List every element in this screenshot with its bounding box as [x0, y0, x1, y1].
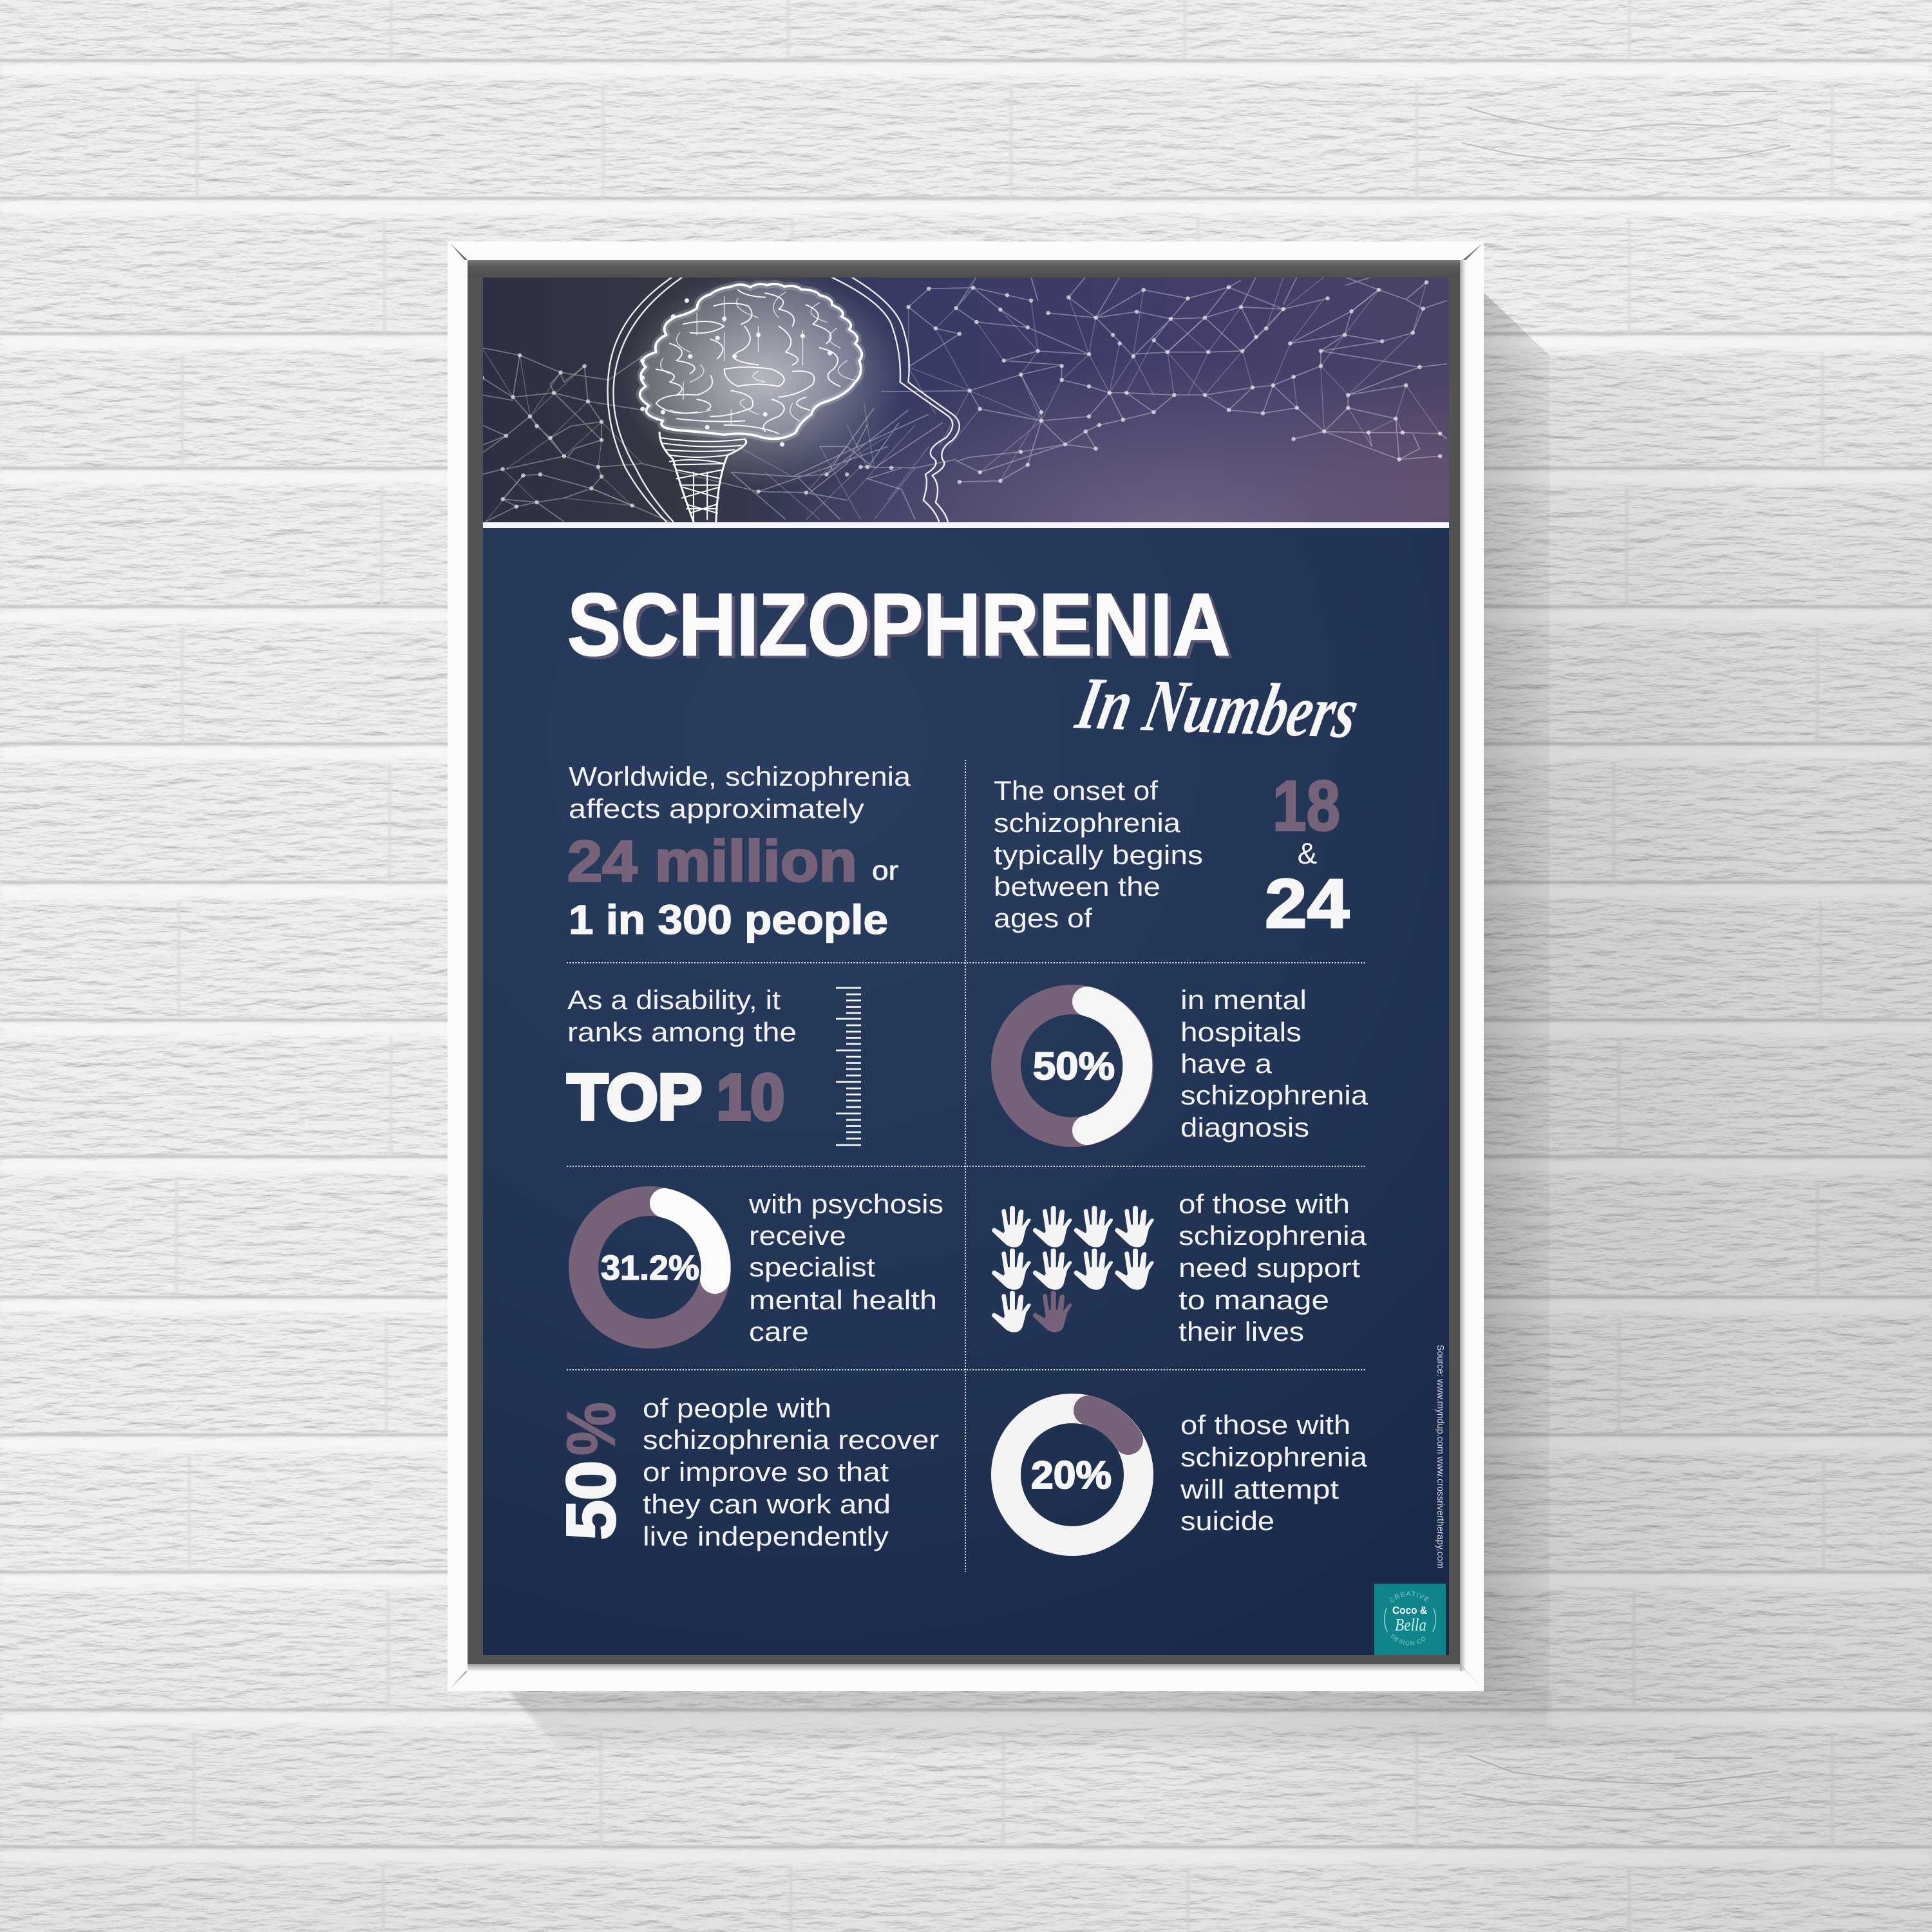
- donut chart: 31.2%: 31.2%: [601, 1249, 699, 1287]
- panel: top 10 disability: [567, 985, 861, 1145]
- logo badge: Coco &: [1392, 1604, 1427, 1616]
- logo badge: Bella: [1395, 1615, 1426, 1634]
- panel: 50% mental hospitals: in mental: [1180, 985, 1307, 1015]
- panel: onset age: &: [1298, 837, 1317, 870]
- panel: hands support: their lives: [1179, 1316, 1304, 1347]
- logo badge: DESIGN CO: [1391, 1634, 1426, 1645]
- donut chart: 50%: [1006, 999, 1139, 1132]
- panel: hands support: schizophrenia: [1179, 1220, 1367, 1251]
- panel: 50% mental hospitals: [1006, 985, 1368, 1142]
- title: SCHIZOPHRENIA: [567, 576, 1230, 674]
- source note: Source: www.myndup.com www.crossrivertherapy.com: [1435, 1345, 1446, 1569]
- rotated stat: 50%: %: [553, 1402, 629, 1455]
- donut chart: 50%: 50%: [1033, 1045, 1115, 1088]
- icon: head silhouette and brain: [608, 276, 960, 522]
- panel: 50% recover: [553, 1393, 939, 1551]
- donut chart: 31.2%: [583, 1201, 716, 1334]
- panel: hands support: need support: [1179, 1253, 1360, 1283]
- panel: onset age: 24: [1265, 864, 1349, 942]
- panel: onset age: schizophrenia: [994, 808, 1181, 838]
- subtitle: In Numbers: [1069, 662, 1365, 754]
- logo badge: CREATIVE: [1390, 1591, 1430, 1602]
- panel: 24 million: 1 in 300 people: [569, 896, 888, 943]
- panel: hands support: to manage: [1179, 1285, 1329, 1315]
- panel: 50% recover: they can work and: [643, 1489, 891, 1519]
- panel: 31.2% psychosis: [583, 1189, 943, 1347]
- panel: 24 million: [567, 761, 911, 943]
- panel: 31.2% psychosis: mental health: [749, 1285, 937, 1315]
- panel: onset age: ages of: [994, 903, 1092, 933]
- panel: onset age: between the: [994, 871, 1160, 902]
- frame drop shadow on wall: [509, 292, 1803, 1750]
- poster: [483, 278, 1449, 1655]
- panel: onset age: [994, 766, 1349, 942]
- panel: top 10 disability: 10: [717, 1061, 784, 1133]
- donut chart: 20%: [1006, 1408, 1139, 1541]
- panel: 24 million: Worldwide, schizophrenia: [569, 761, 911, 791]
- icon: ten hands pictogram: [992, 1206, 1154, 1332]
- panel: 24 million: affects approximately: [569, 793, 864, 824]
- panel: 50% recover: or improve so that: [643, 1457, 889, 1487]
- panel: 50% mental hospitals: diagnosis: [1180, 1112, 1309, 1142]
- panel: 31.2% psychosis: with psychosis: [748, 1189, 943, 1219]
- panel: 31.2% psychosis: receive: [749, 1220, 846, 1251]
- panel: 31.2% psychosis: care: [749, 1316, 809, 1347]
- panel: onset age: 18: [1273, 766, 1340, 846]
- panel: onset age: The onset of: [994, 775, 1158, 806]
- panel: 20% suicide: [1006, 1408, 1368, 1541]
- donut chart: 20%: 20%: [1031, 1454, 1112, 1497]
- rotated stat: 50%: [553, 1402, 629, 1540]
- panel: hands support: of those with: [1179, 1189, 1350, 1219]
- panel: 20% suicide: of those with: [1180, 1410, 1350, 1440]
- panel: 24 million: or: [872, 855, 898, 886]
- picture frame: [448, 242, 1484, 1691]
- header divider line: [483, 522, 1449, 528]
- panel: 50% recover: schizophrenia recover: [643, 1425, 939, 1455]
- icon: ruler scale: [836, 988, 861, 1145]
- panel: 50% recover: of people with: [643, 1393, 831, 1423]
- header image with brain and network: [479, 270, 1449, 522]
- panel: top 10 disability: ranks among the: [567, 1017, 797, 1047]
- panel: 24 million: 24 million: [567, 829, 857, 894]
- panel: top 10 disability: TOP: [567, 1061, 702, 1133]
- panel: 50% mental hospitals: schizophrenia: [1180, 1080, 1368, 1110]
- logo badge: [1374, 1584, 1446, 1655]
- rotated stat: 50%: 50: [553, 1461, 629, 1540]
- panel dividers: [567, 760, 1365, 1572]
- panel: 20% suicide: schizophrenia: [1180, 1442, 1368, 1472]
- panel: hands support: [992, 1189, 1367, 1347]
- panel: 50% mental hospitals: have a: [1180, 1048, 1273, 1079]
- panel: 50% recover: live independently: [643, 1521, 889, 1551]
- panel: top 10 disability: As a disability, it: [567, 985, 781, 1015]
- panel: 20% suicide: suicide: [1180, 1506, 1274, 1536]
- icon: network lines: [479, 277, 1447, 522]
- body background panel: [483, 528, 1449, 1655]
- panel: 50% mental hospitals: hospitals: [1180, 1017, 1302, 1047]
- panel: 31.2% psychosis: specialist: [749, 1252, 875, 1282]
- panel: 20% suicide: will attempt: [1180, 1474, 1339, 1504]
- panel: onset age: typically begins: [994, 840, 1203, 870]
